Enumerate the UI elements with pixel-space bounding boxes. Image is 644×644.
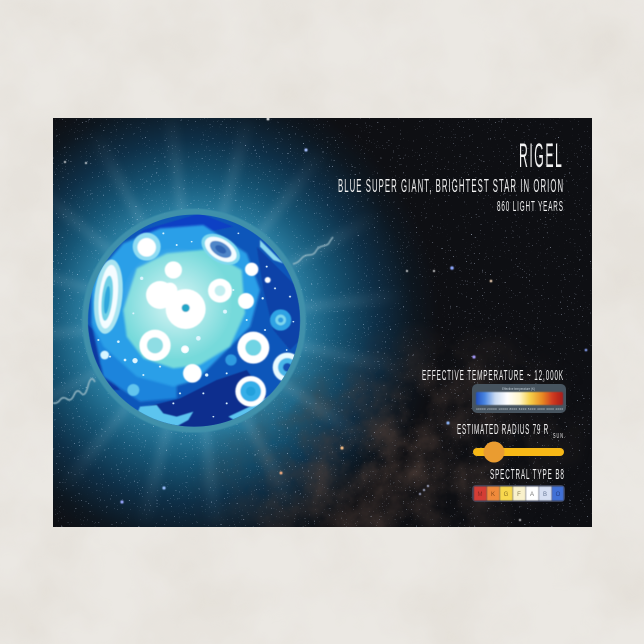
bright cells	[91, 227, 302, 407]
cell: top-left	[133, 233, 161, 261]
radius slider	[473, 442, 564, 462]
temperature chart: Effective temperature (K)	[502, 387, 535, 391]
distance: 860 LIGHT YEARS	[497, 199, 563, 215]
temperature chart	[472, 384, 566, 413]
cell: lower-left ring	[139, 330, 171, 361]
dark navy patches	[87, 213, 303, 430]
estimated radius label: SUN.	[553, 433, 565, 441]
cell: bottom ring	[235, 376, 266, 407]
cell: small lower	[182, 346, 188, 353]
title: RIGEL	[519, 138, 562, 175]
spectral type scale	[472, 485, 565, 502]
spectral type scale: G	[504, 492, 509, 498]
plasma squiggle: left	[53, 379, 95, 403]
spectral type scale: B	[543, 492, 547, 498]
cell: right ring blue	[270, 309, 291, 331]
teal inner region	[123, 249, 245, 368]
spectral type scale: O	[556, 492, 561, 498]
globe rim	[82, 209, 306, 433]
cell: large ring right	[237, 332, 269, 364]
cell: right of core	[208, 279, 232, 303]
bright edge lobes	[133, 240, 283, 430]
spectral type scale: A	[530, 492, 534, 498]
cell: edge ring	[272, 352, 294, 382]
cell: core cluster	[146, 281, 174, 309]
subtitle: BLUE SUPER GIANT, BRIGHTEST STAR IN ORION	[338, 176, 563, 197]
spectral type scale: K	[491, 492, 495, 498]
core glow	[122, 250, 228, 355]
plasma squiggle: right	[293, 237, 333, 264]
surface base	[88, 214, 300, 427]
star field	[53, 118, 592, 527]
mid blue lower region	[92, 323, 177, 402]
cell: small upper	[165, 261, 182, 279]
estimated radius label: ESTIMATED RADIUS 79 R	[457, 422, 548, 438]
cell: top oval ring	[200, 233, 240, 265]
nebula	[217, 342, 561, 527]
speckles	[97, 232, 294, 417]
spectral type scale: M	[478, 492, 482, 498]
light rays	[53, 139, 376, 503]
cell: left crescent ring	[93, 258, 124, 334]
light blue region	[92, 225, 260, 387]
temperature chart: 40000 20000 10000 8000 6000 5000 4000 3000 2000	[476, 407, 563, 411]
spectral type label: SPECTRAL TYPE B8	[490, 467, 564, 483]
spectral type scale: F	[517, 492, 521, 498]
star: Rigel globe	[80, 207, 307, 433]
panel: space card	[53, 118, 592, 527]
effective temperature label: EFFECTIVE TEMPERATURE ~ 12,000K	[422, 368, 563, 384]
